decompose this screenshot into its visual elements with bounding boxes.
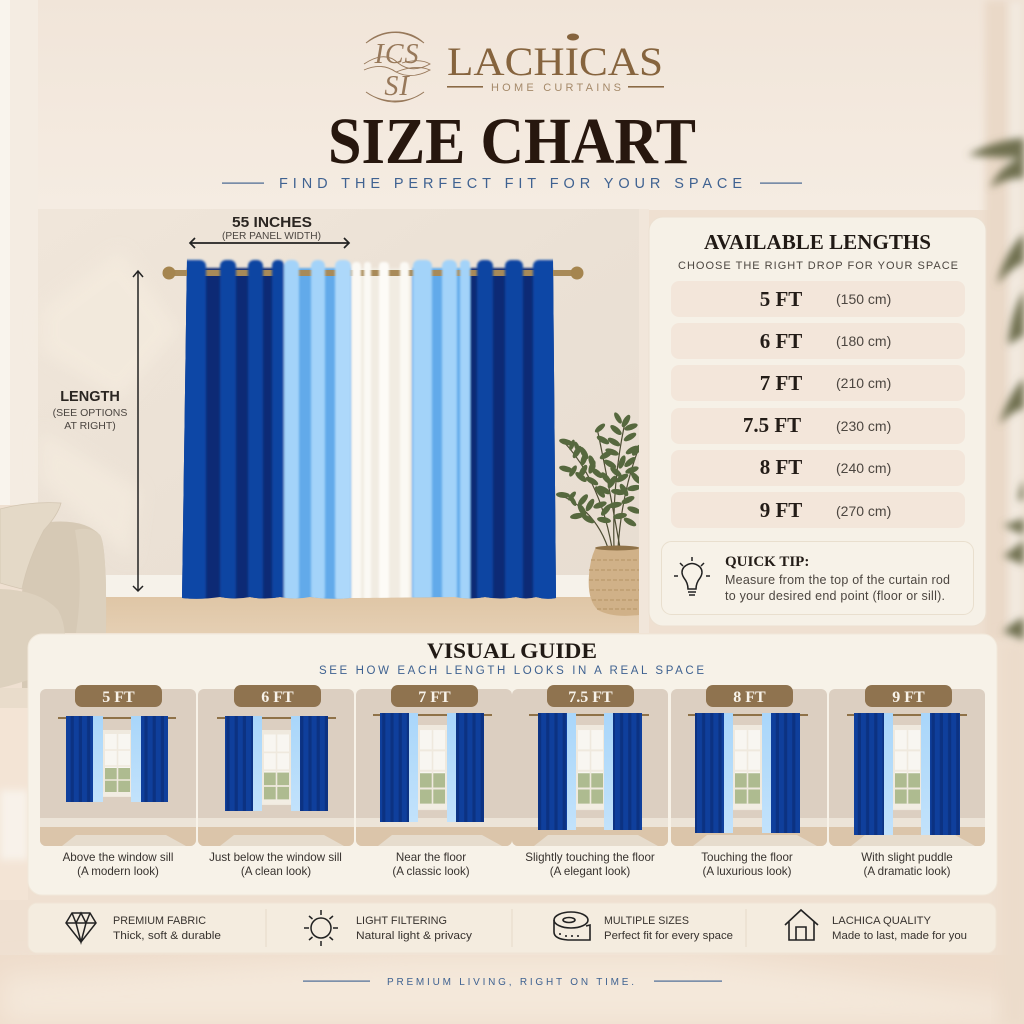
guide card: 7 ft: (A classic look) bbox=[392, 865, 470, 878]
length rows: (210 cm) bbox=[836, 375, 891, 391]
guide card: 8 ft: Touching the floor bbox=[701, 851, 793, 864]
feature: light filtering: Natural light & privacy bbox=[356, 930, 473, 942]
quick tip box: to your desired end point (floor or sill). bbox=[725, 589, 945, 603]
wall light patches bbox=[40, 250, 180, 560]
quick tip box bbox=[662, 542, 974, 614]
icon: light bulb bbox=[674, 557, 710, 595]
length rows: 5 FT bbox=[760, 287, 802, 311]
guide card: 7.5 ft: 7.5 FT bbox=[568, 689, 613, 706]
skirting board bbox=[106, 575, 639, 597]
feature: light filtering: LIGHT FILTERING bbox=[356, 915, 447, 927]
plant stems bbox=[565, 426, 638, 546]
panel: features strip bbox=[28, 903, 996, 953]
length label: (SEE OPTIONS bbox=[53, 407, 127, 419]
curtain fold backs bbox=[180, 268, 558, 602]
logo monogram bbox=[364, 32, 430, 102]
heading: AVAILABLE LENGTHS bbox=[704, 230, 931, 254]
icon: measuring tape bbox=[554, 912, 590, 940]
feature: premium fabric: PREMIUM FABRIC bbox=[113, 915, 206, 927]
length rows: 7 FT bbox=[760, 371, 802, 395]
width label: 55 INCHES bbox=[232, 215, 312, 231]
feature: lachica quality: LACHICA QUALITY bbox=[832, 915, 932, 927]
curtain rod bbox=[162, 266, 584, 280]
length label bbox=[53, 389, 127, 432]
guide card: 7 ft: Near the floor bbox=[396, 851, 466, 864]
guide card: 6 ft: 6 FT bbox=[261, 689, 294, 706]
feature: multiple sizes: MULTIPLE SIZES bbox=[604, 915, 689, 927]
curtain folds bbox=[178, 260, 559, 604]
guide card: 7 ft bbox=[356, 685, 512, 878]
guide card: 7.5 ft: Slightly touching the floor bbox=[525, 851, 655, 864]
width label: (PER PANEL WIDTH) bbox=[222, 231, 321, 242]
length rows: (180 cm) bbox=[836, 333, 891, 349]
guide card: 7 ft: 7 FT bbox=[418, 689, 451, 706]
guide card: 6 ft: Just below the window sill bbox=[209, 851, 342, 864]
icon: house bbox=[785, 910, 818, 940]
main curtain bbox=[162, 260, 584, 604]
logo monogram: ICS bbox=[374, 39, 420, 70]
rod behind folds bbox=[204, 270, 534, 276]
subheading: CHOOSE THE RIGHT DROP FOR YOUR SPACE bbox=[678, 260, 958, 272]
icon: sun bbox=[304, 910, 338, 946]
length rows bbox=[671, 281, 965, 528]
guide card: 5 ft: 5 FT bbox=[102, 689, 135, 706]
guide card: 7.5 ft bbox=[512, 685, 668, 878]
hero room scene bbox=[0, 209, 649, 708]
length rows: 7.5 FT bbox=[743, 413, 801, 437]
feature: multiple sizes: Perfect fit for every space bbox=[604, 930, 733, 942]
length label: AT RIGHT) bbox=[64, 420, 116, 432]
guide card: 8 ft: (A luxurious look) bbox=[703, 865, 792, 878]
logo bbox=[364, 32, 664, 102]
feature: light filtering bbox=[356, 915, 473, 942]
guide card: 8 ft: 8 FT bbox=[733, 689, 766, 706]
guide card: 9 ft: (A dramatic look) bbox=[864, 865, 951, 878]
feature: premium fabric bbox=[113, 915, 221, 942]
guide card: 5 ft bbox=[40, 685, 196, 878]
length label: LENGTH bbox=[60, 389, 120, 405]
feature: lachica quality bbox=[832, 915, 967, 942]
icon: diamond bbox=[66, 913, 96, 942]
wall bbox=[38, 209, 639, 599]
guide card: 6 ft: (A clean look) bbox=[241, 865, 311, 878]
length rows: 9 FT bbox=[760, 498, 802, 522]
guide card: 9 ft bbox=[829, 685, 985, 878]
plant leaves bbox=[556, 411, 644, 528]
tagline: HOME CURTAINS bbox=[491, 82, 621, 94]
quick tip box: Measure from the top of the curtain rod bbox=[725, 573, 950, 587]
length rows: (230 cm) bbox=[836, 418, 891, 434]
feature: premium fabric: Thick, soft & durable bbox=[113, 930, 221, 942]
guide card: 5 ft: (A modern look) bbox=[77, 865, 159, 878]
i dot bbox=[567, 34, 579, 40]
feature: lachica quality: Made to last, made for you bbox=[832, 930, 967, 942]
length rows: (270 cm) bbox=[836, 503, 891, 519]
panel: visual guide bbox=[28, 634, 997, 895]
width label bbox=[222, 215, 321, 242]
panel gutter bbox=[639, 209, 649, 633]
heading: VISUAL GUIDE bbox=[427, 638, 597, 663]
length rows: 8 FT bbox=[760, 455, 802, 479]
length arrow bbox=[133, 271, 143, 591]
tip text: QUICK TIP: bbox=[725, 554, 809, 570]
logo monogram: SI bbox=[384, 71, 410, 102]
panel: available lengths bbox=[649, 217, 986, 626]
width arrow bbox=[190, 238, 349, 248]
guide card: 6 ft bbox=[198, 685, 354, 878]
brand name: LACHICAS bbox=[447, 39, 663, 84]
sofa bbox=[0, 503, 106, 708]
footer: PREMIUM LIVING, RIGHT ON TIME. bbox=[387, 977, 634, 988]
guide card: 5 ft: Above the window sill bbox=[63, 851, 173, 864]
guide card: 9 ft: With slight puddle bbox=[861, 851, 953, 864]
length rows: (240 cm) bbox=[836, 460, 891, 476]
subheading: SEE HOW EACH LENGTH LOOKS IN A REAL SPACE bbox=[319, 665, 704, 677]
length rows: (150 cm) bbox=[836, 291, 891, 307]
subtitle: FIND THE PERFECT FIT FOR YOUR SPACE bbox=[279, 176, 742, 192]
guide card: 7.5 ft: (A elegant look) bbox=[550, 865, 630, 878]
feature: multiple sizes bbox=[604, 915, 733, 942]
guide card: 8 ft bbox=[671, 685, 827, 878]
potted plant bbox=[556, 411, 644, 616]
guide card: 9 ft: 9 FT bbox=[892, 689, 925, 706]
title: SIZE CHART bbox=[328, 105, 696, 178]
woven pot bbox=[589, 547, 639, 616]
length rows: 6 FT bbox=[760, 329, 802, 353]
floor bbox=[105, 597, 639, 633]
blurred plant leaves bbox=[968, 138, 1024, 640]
